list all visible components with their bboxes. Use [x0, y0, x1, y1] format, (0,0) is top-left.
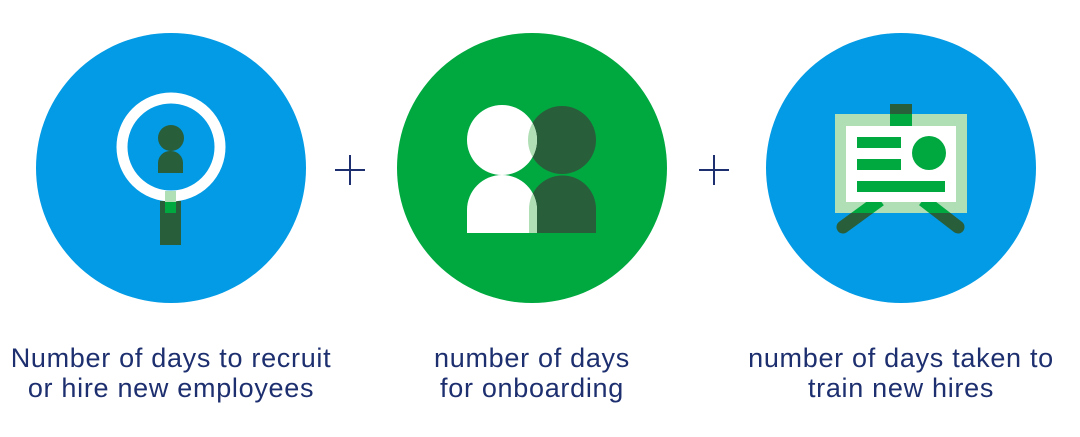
icon: magnifier with person: [122, 98, 220, 245]
caption: onboarding: for onboarding: [440, 373, 624, 403]
panel: onboarding circle: [397, 33, 667, 303]
caption: training: train new hires: [808, 373, 994, 403]
plus sign 1: [335, 155, 365, 185]
panel: training circle: [766, 33, 1036, 303]
graphic row: [36, 33, 1036, 303]
caption: training: number of days taken to: [748, 343, 1054, 373]
caption: training: [748, 343, 1054, 403]
caption: onboarding: [434, 343, 630, 403]
icon: easel: [835, 104, 967, 227]
plus sign 2: [699, 155, 729, 185]
caption: onboarding: number of days: [434, 343, 630, 373]
caption: recruit: [11, 343, 331, 403]
panel: recruit circle: [36, 33, 306, 303]
caption: recruit: Number of days to recruit: [11, 343, 331, 373]
caption: recruit: or hire new employees: [28, 373, 314, 403]
icon: two people: [467, 105, 596, 233]
